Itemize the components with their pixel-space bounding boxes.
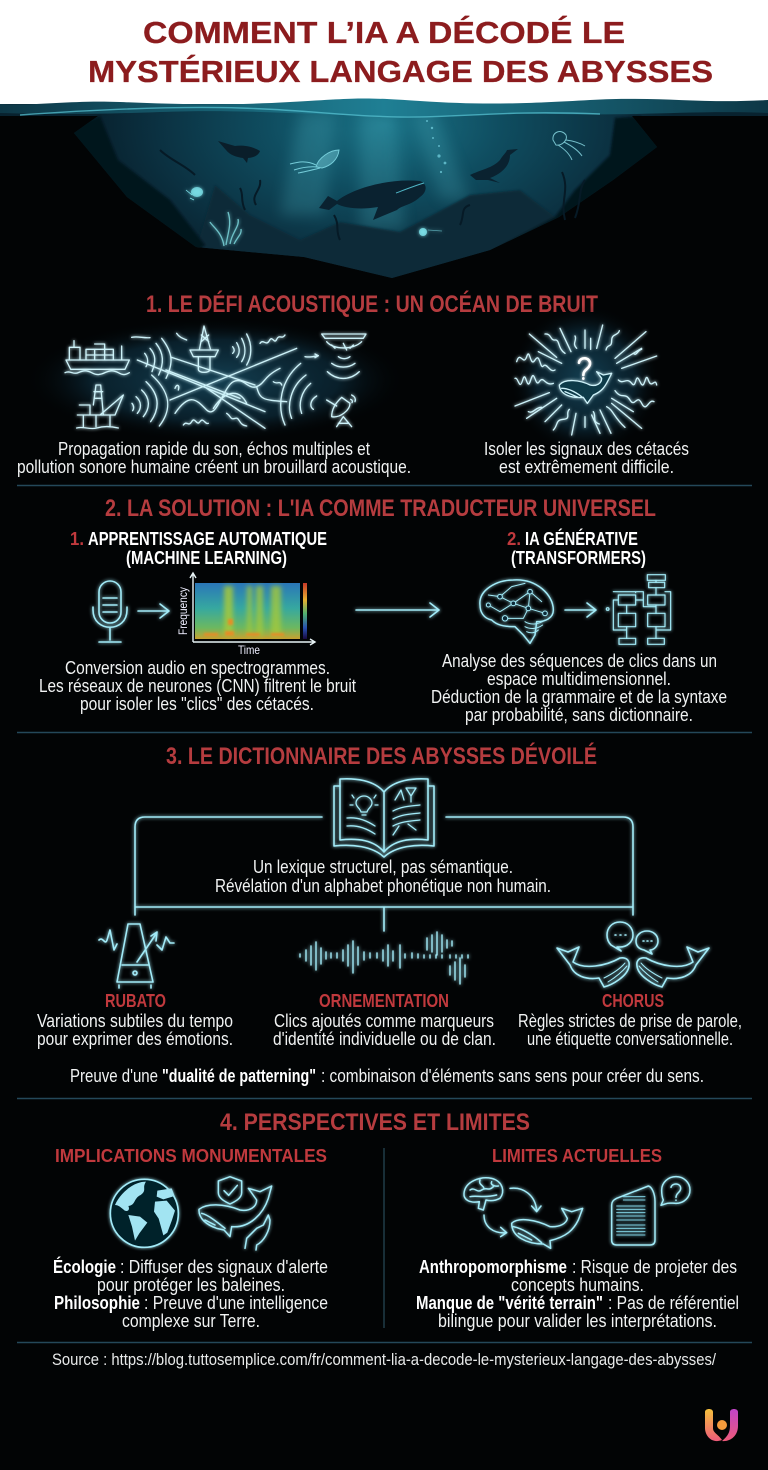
whale	[512, 1208, 583, 1248]
section 1 text right: Isoler les signaux des cétacés	[484, 439, 689, 459]
header band	[0, 0, 768, 108]
section 2 text left: Les réseaux de neurones (CNN) filtrent le bruit	[39, 676, 356, 696]
duality of patterning statement	[70, 1066, 704, 1086]
section 4 heading: 4. PERSPECTIVES ET LIMITES	[220, 1109, 530, 1136]
main whale	[319, 181, 426, 220]
jellyfish right	[553, 132, 585, 160]
lexicon text	[215, 857, 551, 896]
text: implications: : Diffuser des signaux d'alerte	[120, 1257, 328, 1277]
illustration: acoustic noise	[25, 318, 405, 442]
text: limits: concepts humains.	[511, 1275, 644, 1295]
section 1 text left: Propagation rapide du son, échos multiples et	[58, 439, 370, 459]
text: implications: pour protéger les baleines.	[97, 1275, 285, 1295]
subheading: generative AI	[507, 528, 646, 568]
illustration: whale among noise	[510, 305, 660, 455]
text: implications: Écologie	[53, 1256, 116, 1277]
icon: metronome	[99, 924, 174, 988]
icon: globe	[110, 1179, 178, 1247]
icon: microphone	[93, 581, 127, 642]
duality of patterning statement: "dualité de patterning"	[162, 1066, 316, 1086]
card: rubato	[37, 990, 233, 1049]
text: limits: Anthropomorphisme	[419, 1257, 567, 1277]
subheading: machine learning: 1.	[70, 528, 84, 549]
icon: whale	[559, 372, 612, 403]
section 2 text right: Analyse des séquences de clics dans un	[442, 651, 717, 671]
arrow	[565, 603, 596, 617]
ocean illustration	[0, 98, 768, 282]
logo	[705, 1409, 738, 1441]
subheading: machine learning	[70, 528, 327, 568]
section 2 text right	[431, 651, 727, 725]
light rays	[280, 112, 470, 230]
icon: drilling rig	[190, 326, 218, 372]
title: COMMENT L’IA A DÉCODÉ LE	[143, 15, 625, 50]
radiating lines	[515, 325, 657, 435]
dark seaweed	[160, 150, 585, 240]
squid	[290, 150, 339, 173]
water surface	[0, 98, 768, 116]
card: chorus: CHORUS	[602, 990, 664, 1011]
subheading: implications: IMPLICATIONS MONUMENTALES	[55, 1145, 327, 1166]
section 3 heading: 3. LE DICTIONNAIRE DES ABYSSES DÉVOILÉ	[166, 742, 597, 770]
text: limits	[416, 1257, 739, 1331]
colour bar	[303, 583, 307, 639]
dark fish	[218, 141, 260, 163]
icon: two whales talking	[557, 922, 709, 987]
title	[88, 15, 713, 89]
section 2 text right: espace multidimensionnel.	[487, 669, 671, 689]
subheading: generative AI: (TRANSFORMERS)	[511, 547, 646, 568]
card: ornementation: ORNEMENTATION	[319, 990, 449, 1011]
axis label: frequency: Frequency	[176, 587, 190, 635]
bracket connector	[135, 817, 633, 931]
card: ornementation: Clics ajoutés comme marqueurs	[274, 1011, 494, 1031]
sea floor rocks	[196, 185, 559, 282]
icon: cargo ship	[65, 341, 129, 375]
icon: sound wave	[300, 932, 468, 984]
lexicon text: Révélation d'un alphabet phonétique non humain.	[215, 876, 551, 896]
text: implications: Philosophie	[54, 1293, 140, 1313]
text: limits: Manque de "vérité terrain"	[416, 1293, 603, 1313]
icon: open book	[334, 779, 434, 857]
jellyfish left	[186, 187, 203, 200]
brain	[464, 1178, 503, 1210]
long arrow	[356, 603, 439, 617]
card: ornementation: d'identité individuelle ou de clan.	[273, 1029, 496, 1049]
card: rubato: pour exprimer des émotions.	[37, 1029, 233, 1049]
sound waves and lines	[132, 333, 318, 428]
duality of patterning statement: : combinaison d'éléments sans sens pour créer du sens.	[321, 1066, 704, 1086]
icon: satellite dish	[327, 395, 355, 427]
subheading: generative AI: 2.	[507, 528, 521, 549]
icon: protected whale	[199, 1177, 272, 1250]
card: ornementation	[273, 990, 496, 1049]
duality of patterning statement: Preuve d'une	[70, 1066, 158, 1086]
text: limits: : Pas de référentiel	[608, 1293, 739, 1313]
icon: sonar buoy	[322, 334, 366, 378]
title: MYSTÉRIEUX LANGAGE DES ABYSSES	[88, 54, 713, 89]
section 2 text right: Déduction de la grammaire et de la syntaxe	[431, 687, 727, 707]
lexicon text: Un lexique structurel, pas sémantique.	[253, 857, 513, 877]
bubbles	[426, 120, 446, 173]
icon: brain to whale projection	[464, 1178, 583, 1248]
axis label: time: Time	[238, 643, 260, 657]
icon: document with question	[612, 1177, 690, 1245]
arrow	[138, 604, 169, 618]
text: limits: bilingue pour valider les interprétations.	[438, 1311, 717, 1331]
section 2 text left	[39, 658, 356, 714]
icon: brain network	[480, 580, 553, 643]
icon: question mark	[579, 358, 590, 379]
section 2 heading: 2. LA SOLUTION : L'IA COMME TRADUCTEUR UNIVERSEL	[105, 495, 656, 522]
section 1 text right	[484, 439, 689, 477]
subheading: machine learning: APPRENTISSAGE AUTOMATIQUE	[88, 528, 327, 549]
dolphin	[470, 149, 518, 183]
subheading: limits: LIMITES ACTUELLES	[492, 1145, 662, 1166]
section 2 text left: pour isoler les "clics" des cétacés.	[80, 694, 314, 714]
small jellyfish	[419, 228, 442, 236]
section 2 text left: Conversion audio en spectrogrammes.	[65, 658, 330, 678]
icon: offshore platform	[77, 385, 123, 429]
card: rubato: RUBATO	[105, 990, 166, 1011]
section 1 text left	[17, 439, 411, 477]
section 2 text right: par probabilité, sans dictionnaire.	[465, 705, 693, 725]
card: chorus	[518, 990, 742, 1049]
arrows	[484, 1188, 541, 1237]
section 1 text right: est extrêmement difficile.	[499, 457, 674, 477]
text: implications: : Preuve d'une intelligence	[144, 1293, 328, 1313]
card: rubato: Variations subtiles du tempo	[37, 1011, 233, 1031]
chart: spectrogram	[176, 573, 315, 657]
glowing coral	[210, 212, 241, 246]
subheading: generative AI: IA GÉNÉRATIVE	[525, 528, 638, 549]
section 1 heading: 1. LE DÉFI ACOUSTIQUE : UN OCÉAN DE BRUIT	[146, 290, 598, 318]
text: limits: : Risque de projeter des	[572, 1257, 737, 1277]
subheading: machine learning: (MACHINE LEARNING)	[126, 547, 287, 568]
icon: transformer diagram	[606, 575, 671, 644]
axes	[190, 573, 315, 645]
section 1 text left: pollution sonore humaine créent un brouillard acoustique.	[17, 457, 411, 477]
text: implications: complexe sur Terre.	[122, 1311, 260, 1331]
text: implications	[53, 1256, 328, 1331]
